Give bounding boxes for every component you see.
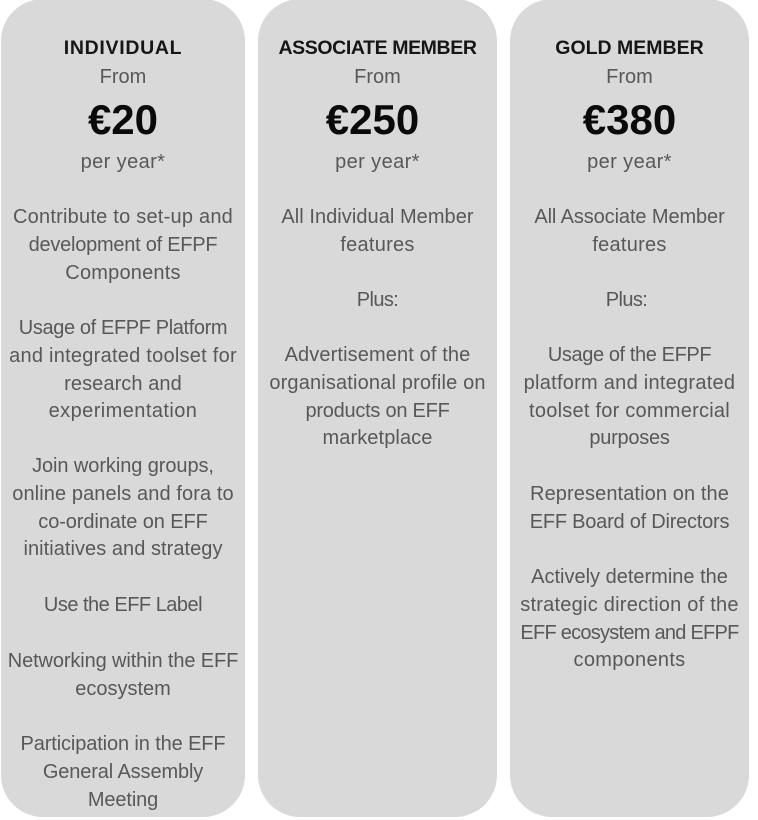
- feature: strategic direction: strategic direction of the: [520, 594, 739, 616]
- feature: commercial usage: toolset for commercial: [529, 400, 730, 422]
- feature: working groups: online panels and fora to: [12, 483, 234, 505]
- panel: gold member: [510, 0, 749, 817]
- feature: commercial usage: Usage of the EFPF: [548, 344, 711, 366]
- feature: working groups: [12, 455, 234, 560]
- price: 250 euro: €250: [326, 96, 419, 143]
- price: 380 euro: €380: [583, 96, 676, 143]
- feature: contribute: Components: [65, 262, 181, 284]
- feature: platform usage: research and: [64, 372, 182, 394]
- text: from: From: [606, 66, 653, 88]
- feature: individual features: [281, 206, 474, 256]
- feature: advertisement: Advertisement of the: [285, 344, 470, 366]
- feature: contribute: [13, 206, 233, 284]
- feature: strategic direction: Actively determine the: [531, 566, 728, 588]
- feature: plus: Plus:: [357, 289, 398, 311]
- heading: individual: INDIVIDUAL: [64, 37, 182, 59]
- feature: platform usage: experimentation: [49, 400, 197, 422]
- feature: advertisement: organisational profile on: [269, 372, 486, 394]
- feature: commercial usage: purposes: [589, 427, 670, 449]
- heading: gold member: GOLD MEMBER: [555, 37, 704, 59]
- feature: board representation: [530, 483, 729, 533]
- feature: networking: Networking within the EFF: [8, 650, 238, 672]
- text: per year: per year*: [335, 151, 420, 173]
- feature: commercial usage: platform and integrated: [524, 372, 735, 394]
- feature: associate features: features: [592, 234, 667, 256]
- feature: strategic direction: EFF ecosystem and EFPF: [520, 622, 739, 644]
- feature: advertisement: [269, 344, 486, 449]
- text: from: From: [100, 66, 146, 88]
- heading: associate member: ASSOCIATE MEMBER: [278, 37, 476, 59]
- feature: general assembly: General Assembly: [43, 761, 203, 783]
- text: from: From: [354, 66, 401, 88]
- text: per year: per year*: [81, 151, 165, 173]
- feature: contribute: development of EFPF: [29, 234, 217, 256]
- feature: individual features: features: [340, 234, 415, 256]
- feature: general assembly: [20, 733, 226, 810]
- panel: individual: [1, 0, 245, 817]
- panel: associate member: [258, 0, 497, 817]
- feature: networking: ecosystem: [75, 678, 171, 700]
- feature: working groups: Join working groups,: [32, 455, 214, 477]
- price: 20 euro: €20: [88, 96, 158, 143]
- feature: contribute: Contribute to set-up and: [13, 206, 233, 228]
- feature: board representation: EFF Board of Directors: [530, 511, 729, 533]
- feature: plus: Plus:: [606, 289, 647, 311]
- feature: commercial usage: [524, 344, 735, 449]
- feature: associate features: [534, 206, 725, 256]
- feature: platform usage: and integrated toolset for: [9, 345, 237, 367]
- feature: individual features: All Individual Member: [281, 206, 474, 228]
- feature: advertisement: products on EFF: [305, 400, 450, 422]
- feature: platform usage: [9, 317, 237, 422]
- feature: strategic direction: components: [574, 649, 685, 671]
- feature: working groups: co-ordinate on EFF: [38, 510, 208, 532]
- feature: working groups: initiatives and strategy: [23, 538, 223, 560]
- feature: networking: [8, 650, 238, 700]
- feature: platform usage: Usage of EFPF Platform: [19, 317, 227, 339]
- text: per year: per year*: [587, 151, 672, 173]
- feature: strategic direction: [520, 566, 739, 671]
- feature: board representation: Representation on the: [530, 483, 729, 505]
- feature: label: Use the EFF Label: [44, 594, 202, 616]
- feature: advertisement: marketplace: [322, 427, 433, 449]
- feature: associate features: All Associate Member: [534, 206, 725, 228]
- feature: general assembly: Meeting: [88, 788, 158, 810]
- feature: general assembly: Participation in the EFF: [20, 733, 226, 755]
